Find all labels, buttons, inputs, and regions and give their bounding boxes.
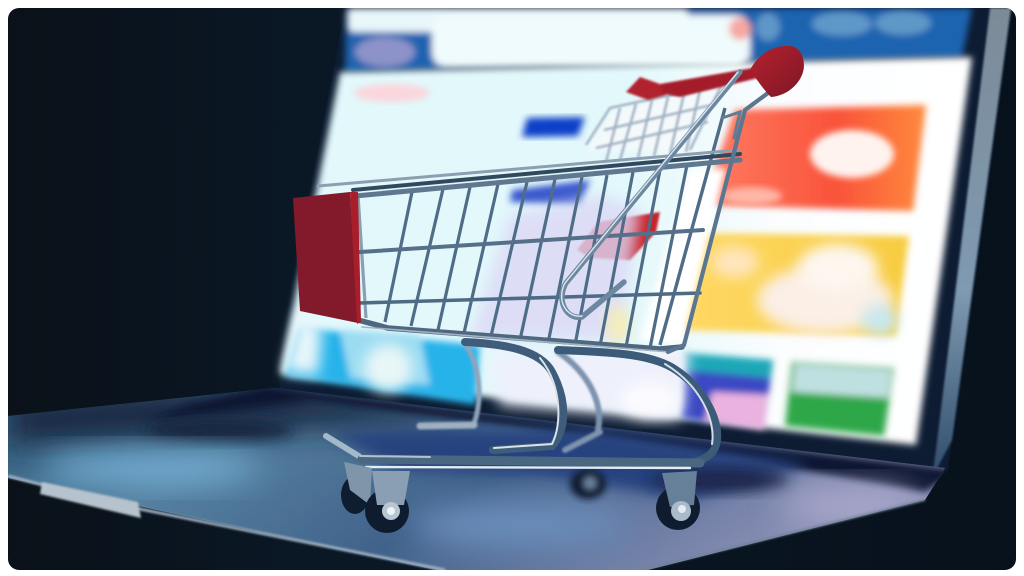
pink blur — [354, 84, 430, 102]
side port highlight — [40, 482, 141, 518]
laptop lid — [278, 8, 1012, 492]
red front handle block — [293, 192, 361, 324]
rear basket, out of focus — [588, 98, 687, 151]
lid edge highlight — [932, 8, 1011, 478]
left blue thumbnail — [285, 328, 480, 405]
yellow banner — [680, 233, 909, 336]
rear cart wheel — [570, 469, 606, 499]
screen hinge shadow — [150, 386, 960, 492]
red rear corner piece through mesh — [577, 212, 660, 260]
red rear handle, out of focus — [626, 68, 758, 100]
front left wheel — [365, 471, 410, 533]
rear left wheel — [341, 462, 372, 514]
browser header bar — [345, 8, 972, 72]
front silver edge — [8, 476, 445, 570]
red top grip — [750, 46, 804, 97]
bottom thumbnails — [680, 353, 894, 436]
chassis side hoops — [465, 342, 717, 464]
lavender centre blur — [490, 350, 690, 420]
trackpad shadow — [145, 418, 295, 442]
main web page panel — [280, 57, 972, 445]
laptop screen — [280, 8, 972, 445]
blue reflections in the basket — [510, 180, 590, 205]
red banner — [702, 105, 926, 211]
cart base rail — [326, 436, 700, 468]
basket wire verticals — [358, 108, 725, 348]
right basket frame — [668, 93, 768, 352]
blue product label — [522, 117, 585, 137]
deck top darkening — [8, 380, 500, 445]
basket horizontal rails — [318, 150, 740, 352]
deck reflection — [330, 430, 810, 500]
rear legs, out of focus — [420, 345, 600, 450]
laptop keyboard deck — [8, 380, 968, 575]
long hanging handle wire — [562, 72, 740, 317]
white panel behind basket right — [640, 168, 726, 345]
shopping cart — [293, 46, 804, 533]
front right wheel — [656, 471, 700, 530]
